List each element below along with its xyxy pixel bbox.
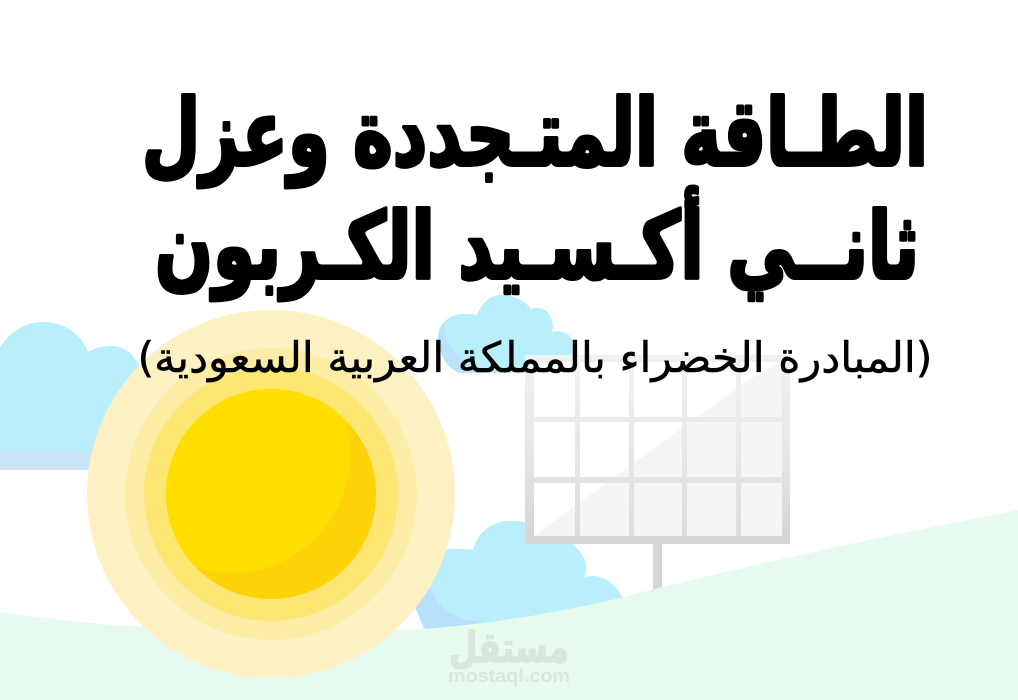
watermark arabic: مستقل: [449, 623, 569, 672]
panel post: [653, 544, 662, 594]
panel grid: [534, 355, 782, 536]
sun: [87, 310, 455, 678]
panel cells background: [534, 362, 782, 536]
cloud: lower middle: [415, 521, 622, 640]
panel frame: [525, 355, 790, 544]
cloud: left: [0, 322, 140, 470]
watermark latin: mostaql.com: [448, 666, 570, 686]
cloud: upper middle: [438, 295, 577, 373]
watermark: [448, 623, 570, 686]
solar panel: [525, 355, 790, 594]
subtitle: (المبادرة الخضراء بالمملكة العربية السعودية): [138, 333, 932, 382]
panel reflection: [534, 362, 782, 536]
green hill: [0, 510, 1018, 700]
